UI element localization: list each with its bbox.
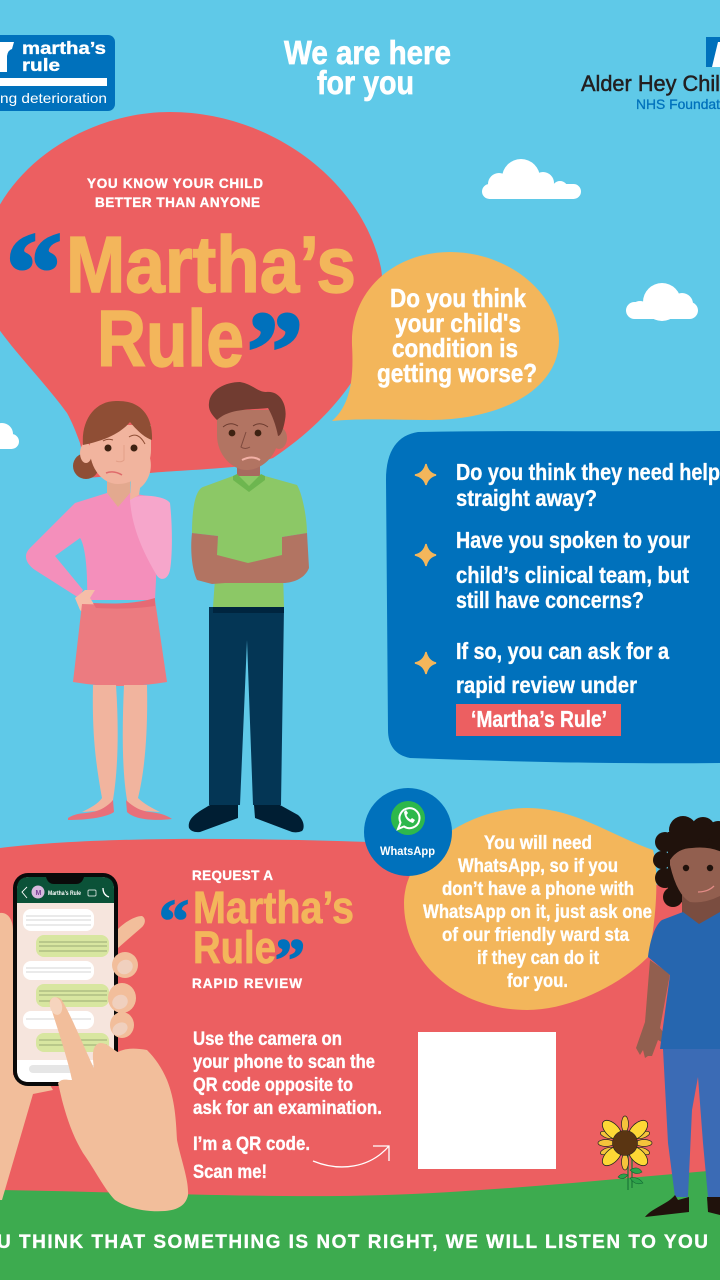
QR prompt text bbox=[193, 1134, 310, 1183]
whatsapp speech bubble: You will need bbox=[484, 832, 592, 854]
illustration: hands holding phone: Martha’s Rule bbox=[48, 891, 82, 897]
question bubble: orange: Do you think bbox=[390, 283, 526, 313]
title: We are here bbox=[284, 34, 451, 71]
heading: request a Martha's Rule rapid review: ” bbox=[275, 927, 305, 993]
figure: concerned father bbox=[189, 382, 309, 832]
heading: request a Martha's Rule rapid review: REQUEST A bbox=[192, 868, 273, 883]
panel: rapid review questions: rapid review under bbox=[456, 672, 637, 698]
whatsapp speech bubble: for you. bbox=[507, 970, 568, 992]
cloud bbox=[0, 423, 19, 449]
ground bbox=[0, 1170, 720, 1280]
logo: Martha's Rule: rule bbox=[22, 55, 60, 75]
heading: you know your child: BETTER THAN ANYONE bbox=[95, 195, 260, 210]
icon: star bullet bbox=[415, 652, 436, 674]
title: for you bbox=[317, 64, 414, 101]
red lower panel bbox=[0, 839, 720, 1200]
whatsapp speech bubble: of our friendly ward sta bbox=[442, 924, 629, 946]
QR prompt text: Scan me! bbox=[193, 1162, 267, 1183]
badge: WhatsApp bbox=[364, 788, 452, 876]
heading: request a Martha's Rule rapid review: RAPID REVIEW bbox=[192, 976, 302, 991]
QR prompt text: I’m a QR code. bbox=[193, 1134, 310, 1155]
instructions text bbox=[193, 1029, 382, 1119]
heading: request a Martha's Rule rapid review: Rule bbox=[193, 922, 276, 973]
illustration: hands holding phone bbox=[0, 873, 188, 1211]
figure: worried mother bbox=[26, 401, 172, 820]
question bubble: orange: getting worse? bbox=[377, 358, 537, 388]
whatsapp speech bubble: WhatsApp on it, just ask one bbox=[423, 901, 652, 923]
whatsapp speech bubble: don’t have a phone with bbox=[442, 878, 634, 900]
question bubble: orange: condition is bbox=[392, 333, 518, 363]
title bbox=[284, 34, 451, 101]
heading: request a Martha's Rule rapid review bbox=[159, 868, 354, 993]
heading: request a Martha's Rule rapid review: Martha’s bbox=[193, 882, 354, 933]
heading: you know your child: YOU KNOW YOUR CHILD bbox=[87, 176, 263, 191]
icon: star bullet bbox=[415, 464, 436, 485]
heading: you know your child bbox=[87, 176, 263, 210]
arrow to QR code bbox=[313, 1146, 389, 1167]
heading: request a Martha's Rule rapid review: “ bbox=[159, 888, 189, 954]
QR code placeholder bbox=[418, 1032, 556, 1169]
cloud bbox=[482, 159, 581, 199]
logo: Martha's Rule bbox=[0, 35, 115, 111]
heading: Martha's Rule bbox=[6, 211, 356, 414]
logo: Alder Hey NHS: Alder Hey Chil bbox=[581, 71, 720, 96]
instructions text: ask for an examination. bbox=[193, 1098, 382, 1119]
icon: sunflower bbox=[598, 1116, 652, 1190]
instructions text: Use the camera on bbox=[193, 1029, 342, 1050]
footer message: U THINK THAT SOMETHING IS NOT RIGHT, WE WILL LISTEN TO YOU bbox=[0, 1232, 708, 1253]
logo: Martha's Rule: ng deterioration bbox=[0, 90, 107, 106]
heading: Martha's Rule: “ bbox=[6, 211, 62, 335]
logo: Alder Hey NHS bbox=[581, 37, 720, 112]
panel: rapid review questions: straight away? bbox=[456, 485, 597, 511]
heading: Martha's Rule: Martha’s bbox=[66, 220, 356, 309]
panel: rapid review questions bbox=[386, 431, 720, 763]
red speech bubble bbox=[0, 112, 383, 478]
figure: nurse bbox=[636, 816, 720, 1217]
question bubble: orange: your child's bbox=[395, 308, 521, 338]
panel: rapid review questions: still have concerns? bbox=[456, 587, 644, 613]
whatsapp speech bubble: WhatsApp, so if you bbox=[458, 855, 618, 877]
instructions text: QR code opposite to bbox=[193, 1075, 353, 1096]
icon: star bullet bbox=[415, 544, 436, 566]
panel: rapid review questions: If so, you can ask for a bbox=[456, 638, 669, 664]
heading: Martha's Rule: Rule bbox=[97, 294, 244, 383]
illustration: hands holding phone: M bbox=[36, 890, 42, 897]
question bubble: orange bbox=[332, 252, 559, 421]
cloud bbox=[626, 283, 698, 321]
logo: Alder Hey NHS: NHS Foundat bbox=[636, 96, 720, 112]
whatsapp speech bubble bbox=[404, 808, 656, 1010]
logo: Martha's Rule: martha’s bbox=[22, 38, 106, 58]
heading: Martha's Rule: ” bbox=[247, 290, 303, 414]
badge: WhatsApp: WhatsApp bbox=[380, 846, 435, 858]
whatsapp speech bubble: if they can do it bbox=[477, 947, 599, 969]
panel: rapid review questions: child’s clinical team, but bbox=[456, 562, 689, 588]
panel: rapid review questions: ‘Martha’s Rule’ bbox=[471, 706, 607, 732]
instructions text: your phone to scan the bbox=[193, 1052, 375, 1073]
